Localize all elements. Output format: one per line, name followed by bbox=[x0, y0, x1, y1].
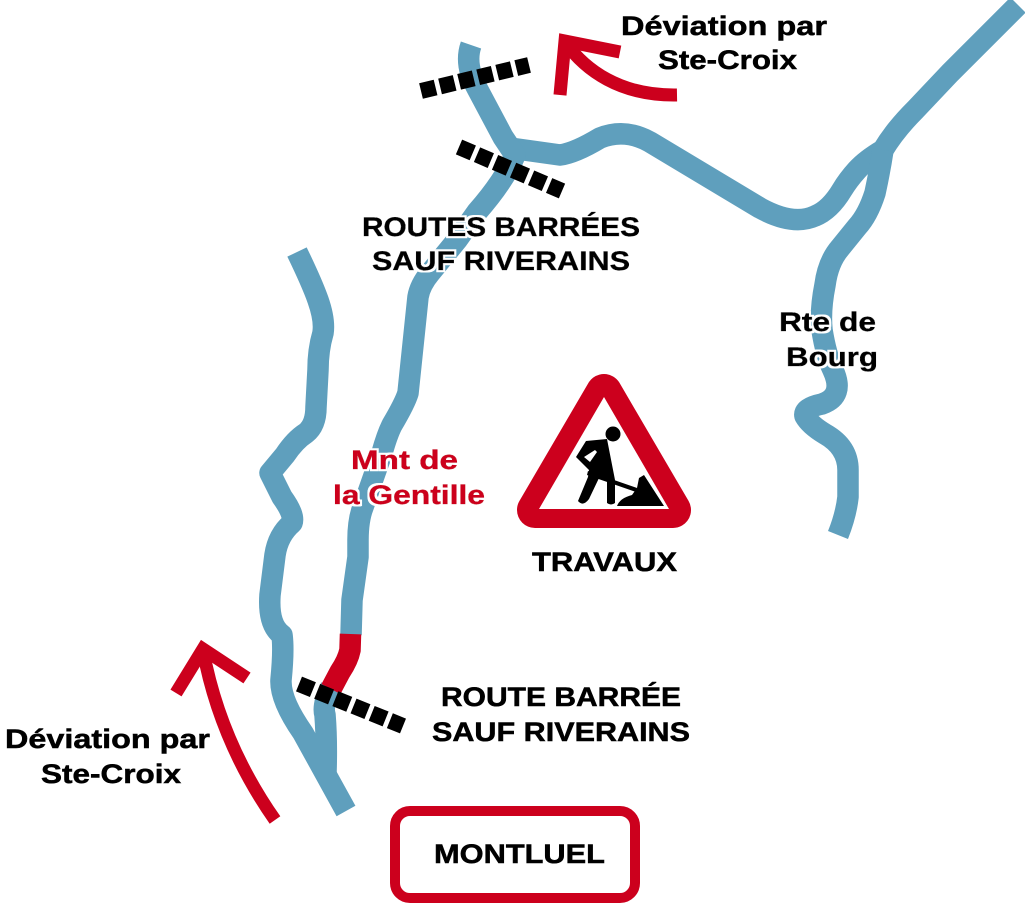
arrow: north detour bbox=[560, 41, 677, 95]
label: routes closed north: ROUTES BARRÉES bbox=[362, 211, 640, 242]
road: north branch and Montée de la Gentille bbox=[324, 45, 515, 772]
box: Montluel: MONTLUEL bbox=[434, 839, 605, 869]
label: route closed south: SAUF RIVERAINS bbox=[432, 717, 690, 747]
label: Rte de Bourg bbox=[779, 307, 878, 372]
label: north detour: Ste-Croix bbox=[658, 45, 797, 75]
label: south detour bbox=[5, 724, 211, 789]
box: Montluel bbox=[395, 811, 635, 898]
arrow: south detour bbox=[176, 649, 275, 820]
label: Rte de Bourg: Rte de bbox=[779, 307, 876, 337]
label: south detour: Ste-Croix bbox=[41, 759, 181, 789]
road: Route de Bourg main road bbox=[510, 5, 1018, 535]
icon: worker with shovel bbox=[576, 426, 664, 506]
label: Rte de Bourg: Bourg bbox=[786, 342, 878, 372]
label: route closed south: ROUTE BARRÉE bbox=[441, 681, 681, 712]
label: travaux: TRAVAUX bbox=[532, 547, 677, 577]
label: north detour bbox=[621, 11, 828, 75]
barrier: junction bbox=[459, 147, 562, 191]
label: route closed south bbox=[432, 681, 690, 747]
label: Montée de la Gentille: Mnt de bbox=[351, 445, 458, 475]
label: Montée de la Gentille: la Gentille bbox=[333, 480, 485, 510]
road: western road bbox=[270, 252, 346, 811]
barrier: south bbox=[299, 684, 403, 726]
road section closed (red) bbox=[331, 634, 350, 689]
barrier: north bbox=[421, 65, 529, 91]
label: north detour: Déviation par bbox=[621, 11, 828, 41]
label: routes closed north bbox=[362, 211, 640, 276]
label: south detour: Déviation par bbox=[5, 724, 211, 754]
label: Montée de la Gentille bbox=[333, 445, 485, 510]
label: routes closed north: SAUF RIVERAINS bbox=[372, 246, 630, 276]
icon: roadworks warning sign bbox=[535, 392, 673, 510]
